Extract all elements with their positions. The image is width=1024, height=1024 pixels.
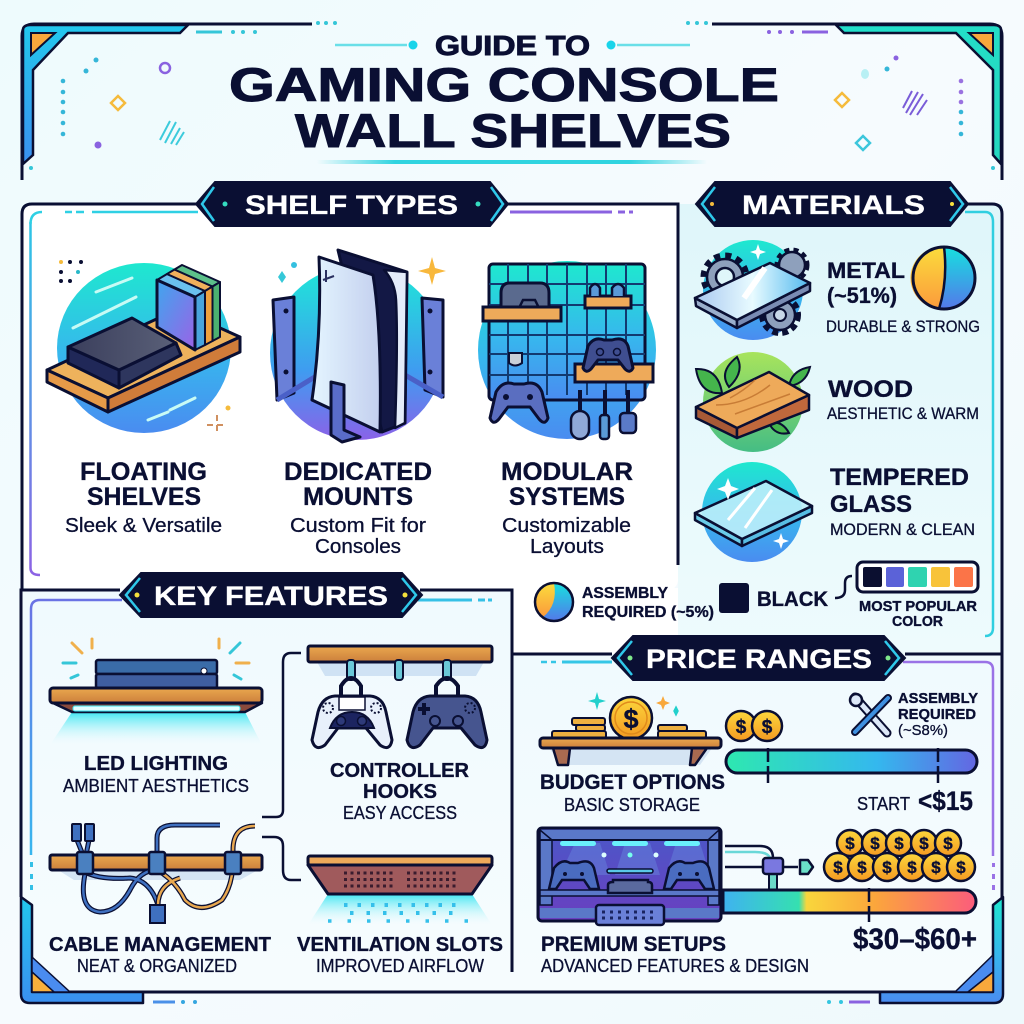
label: cable management: NEAT & ORGANIZED <box>77 956 237 976</box>
label: assembly required 58%: ASSEMBLY <box>898 690 978 707</box>
icon: budget shelf <box>540 692 721 765</box>
label: floating shelves: Sleek & Versatile <box>65 515 222 537</box>
label: tempered glass: MODERN & CLEAN <box>830 520 975 539</box>
icon: coin pile: $ <box>870 834 880 853</box>
icon: coin pile: $ <box>931 858 941 877</box>
label: metal <box>826 258 980 336</box>
icon: tempered glass <box>695 462 812 562</box>
palette: most popular color: COLOR <box>892 614 944 630</box>
label: budget options: BASIC STORAGE <box>564 795 700 815</box>
icon: coin pile: $ <box>943 834 953 853</box>
title: GAMING CONSOLE <box>229 58 779 111</box>
label: wood: WOOD <box>828 376 913 403</box>
heading: shelf types: SHELF TYPES <box>245 190 458 220</box>
label: tempered glass: GLASS <box>830 491 912 518</box>
heading: materials <box>696 182 968 226</box>
label: budget price: <$15 <box>918 786 973 816</box>
icon: wood <box>696 352 810 452</box>
chart: budget price bar <box>726 748 977 783</box>
label: modular systems: Layouts <box>530 536 604 558</box>
label: modular systems: SYSTEMS <box>509 483 625 511</box>
heading: key features: KEY FEATURES <box>154 581 388 611</box>
label: dedicated mounts: Consoles <box>315 536 401 558</box>
swatch: black: BLACK <box>757 588 828 611</box>
icon: coin pile: $ <box>845 834 855 853</box>
label: premium price: $30–$60+ <box>853 923 977 956</box>
label: budget options <box>540 771 725 815</box>
icon: two coins: $ <box>762 717 773 738</box>
icon: two coins <box>726 711 782 741</box>
heading: price ranges: PRICE RANGES <box>646 644 872 674</box>
corner: bottom left <box>21 897 197 1004</box>
label: floating shelves: FLOATING <box>80 458 207 486</box>
label: dedicated mounts: DEDICATED <box>284 458 432 486</box>
panel: price ranges <box>20 654 1002 992</box>
connector: features lower <box>262 837 301 880</box>
icon: two coins: $ <box>736 717 747 738</box>
decorations: header right <box>835 56 963 150</box>
heading: shelf types <box>196 182 508 226</box>
label: premium setups: ADVANCED FEATURES & DESIGN <box>541 956 809 976</box>
icon: coin pile: $ <box>907 858 917 877</box>
heading: materials: MATERIALS <box>742 190 925 220</box>
panel: key features <box>21 590 512 992</box>
label: controller hooks: EASY ACCESS <box>343 803 457 823</box>
swatch: black <box>719 576 852 613</box>
label: metal: DURABLE & STRONG <box>826 317 980 336</box>
label: cable management: CABLE MANAGEMENT <box>49 934 271 956</box>
icon: metal <box>695 240 810 340</box>
label: budget options: BUDGET OPTIONS <box>540 771 725 794</box>
icon: tools <box>850 694 888 733</box>
decorations: header left <box>61 58 184 148</box>
icon: coin pile: $ <box>894 834 904 853</box>
label: floating shelves <box>65 458 222 537</box>
palette: most popular color <box>857 562 978 630</box>
icon: coin pile: $ <box>919 834 929 853</box>
label: assembly required 5%: ASSEMBLY <box>582 585 668 602</box>
label: premium setups <box>541 933 809 976</box>
label: controller hooks <box>330 760 470 823</box>
label: metal: METAL <box>827 258 905 283</box>
label: dedicated mounts: Custom Fit for <box>290 515 426 537</box>
icon: coin pile: $ <box>956 858 966 877</box>
label: wood <box>827 376 979 423</box>
label: tempered glass: TEMPERED <box>830 464 969 491</box>
chart: assembly pie <box>535 583 573 621</box>
label: budget price <box>857 786 973 816</box>
panel: shelf types <box>22 204 678 590</box>
icon: budget shelf: $ <box>623 704 639 734</box>
icon: coin pile: $ <box>882 858 892 877</box>
chart: premium price bar <box>723 888 976 922</box>
label: assembly required 58% <box>898 690 978 739</box>
label: ventilation slots: IMPROVED AIRFLOW <box>316 956 484 976</box>
label: floating shelves: SHELVES <box>87 483 201 511</box>
corner: bottom right <box>827 897 1003 1004</box>
icon: ventilation slots <box>308 856 492 925</box>
icon: coin pile: $ <box>857 858 867 877</box>
label: dedicated mounts: MOUNTS <box>303 483 413 511</box>
icon: floating shelf <box>47 260 240 435</box>
icon: dedicated mount <box>270 250 446 442</box>
label: ventilation slots: VENTILATION SLOTS <box>297 934 503 956</box>
label: assembly required 58%: REQUIRED <box>898 706 976 723</box>
label: budget price: START <box>857 794 910 814</box>
palette: most popular color: MOST POPULAR <box>859 599 978 615</box>
label: LED lighting: LED LIGHTING <box>84 753 228 775</box>
header frame <box>22 21 1002 180</box>
label: controller hooks: CONTROLLER <box>330 760 470 782</box>
label: dedicated mounts <box>284 458 432 558</box>
label: cable management <box>49 934 271 976</box>
icon: coin pile <box>824 830 975 881</box>
label: metal: (~51%) <box>827 283 897 308</box>
heading: price ranges <box>612 636 905 680</box>
icon: controller hooks <box>308 646 492 748</box>
connector: features upper <box>262 653 301 817</box>
label: wood: AESTHETIC & WARM <box>827 404 979 423</box>
label: ventilation slots <box>297 934 503 976</box>
title: GUIDE TO <box>435 30 590 61</box>
label: assembly required 58%: (~S8%) <box>898 722 948 739</box>
panel: materials <box>512 204 1002 654</box>
connector: premium wires <box>725 846 813 890</box>
label: controller hooks: HOOKS <box>363 781 437 803</box>
label: modular systems: MODULAR <box>501 458 633 486</box>
icon: premium setup <box>538 828 721 925</box>
title <box>229 30 779 164</box>
label: assembly required 5%: REQUIRED (~5%) <box>582 604 714 621</box>
label: LED lighting: AMBIENT AESTHETICS <box>63 776 249 796</box>
label: tempered glass <box>830 464 975 539</box>
label: LED lighting <box>63 753 249 796</box>
icon: coin pile: $ <box>833 858 843 877</box>
label: modular systems <box>501 458 633 558</box>
icon: LED lighting <box>50 639 262 745</box>
label: premium setups: PREMIUM SETUPS <box>541 933 726 956</box>
heading: key features <box>120 573 422 617</box>
title: WALL SHELVES <box>295 104 731 157</box>
chart: metal pie <box>910 247 975 309</box>
label: assembly required 5% <box>582 585 714 621</box>
icon: cable management <box>50 824 262 923</box>
icon: modular system <box>478 261 656 439</box>
label: modular systems: Customizable <box>502 515 631 537</box>
